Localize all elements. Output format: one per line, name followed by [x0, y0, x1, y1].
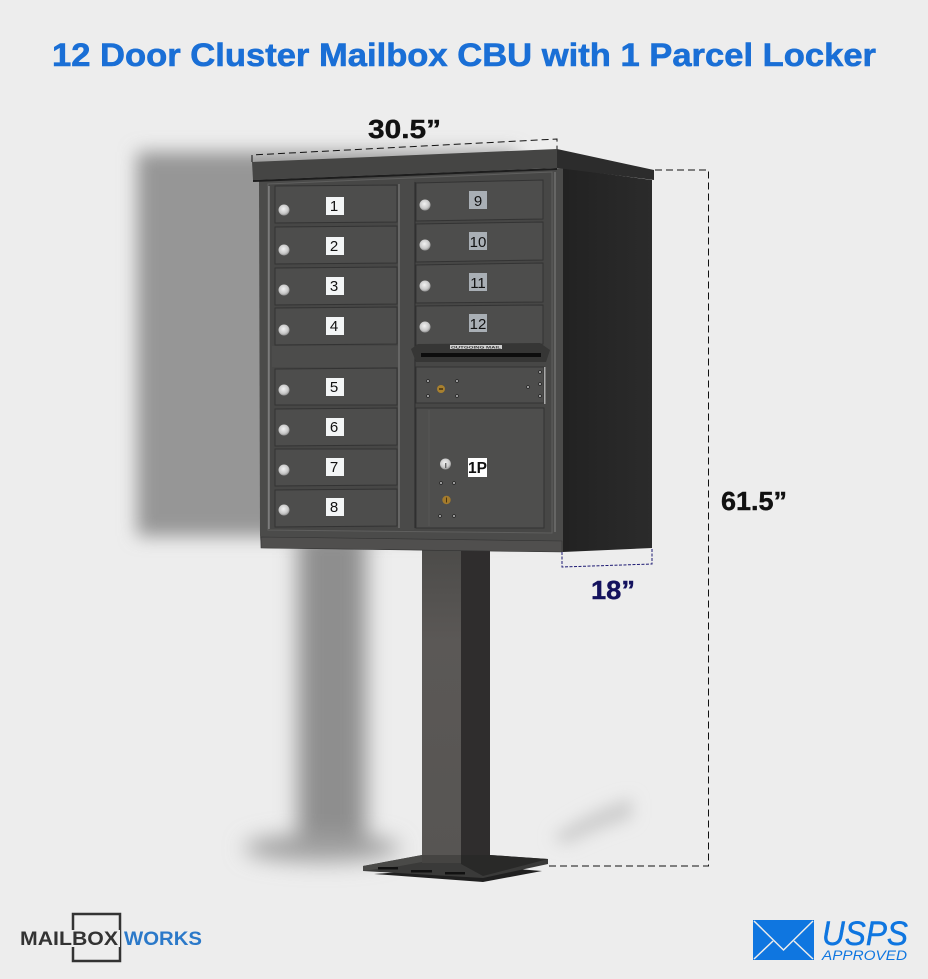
door number tags 1-8: 5 — [330, 379, 338, 396]
wall shadow of post — [244, 530, 400, 862]
door locks — [278, 200, 430, 516]
cabinet front — [259, 168, 563, 552]
door number tags 9-12: 9 — [474, 193, 482, 210]
logo: Mailbox Works: WORKS — [124, 929, 202, 950]
dimension: depth 18 — [562, 549, 652, 605]
cabinet side — [563, 168, 652, 552]
door number tags 9-12 — [469, 191, 487, 333]
door number tags 1-8: 4 — [330, 318, 338, 335]
door number tags 9-12: 12 — [470, 316, 486, 333]
pedestal post — [422, 548, 490, 860]
wall shadow of cabinet — [137, 152, 517, 536]
outgoing mail slot: OUTGOING MAIL — [451, 345, 502, 350]
outgoing mail slot — [411, 343, 550, 362]
master access panel — [416, 367, 546, 404]
dimension: depth 18: 18” — [591, 575, 635, 605]
door number tags 1-8: 2 — [330, 238, 338, 255]
cluster mailbox unit — [252, 149, 654, 882]
floor shadow right of post — [552, 798, 632, 844]
dimension: width 30.5: 30.5” — [368, 114, 441, 144]
inner door frame — [268, 172, 555, 533]
dimension: height 61.5: 61.5” — [721, 486, 787, 516]
door number tags 1-8: 3 — [330, 278, 338, 295]
logo: Mailbox Works: MAILBOX — [20, 929, 118, 950]
door number tags 1-8 — [326, 197, 344, 516]
base plate — [363, 855, 548, 882]
parcel locker door: 1P — [468, 460, 487, 477]
dimension: width 30.5 — [252, 114, 557, 162]
door number tags 1-8: 1 — [330, 198, 338, 215]
bottom plinth — [261, 537, 562, 552]
logo: USPS Approved — [753, 915, 908, 963]
logo: USPS Approved: APPROVED — [821, 948, 907, 963]
door number tags 1-8: 7 — [330, 459, 338, 476]
door number tags 9-12: 11 — [470, 275, 486, 292]
logo: Mailbox Works — [20, 914, 202, 961]
icon: envelope — [753, 920, 814, 960]
right mailbox doors 9-12 — [416, 180, 543, 345]
door number tags 9-12: 10 — [470, 234, 486, 251]
logo: USPS Approved: USPS — [822, 915, 908, 953]
door number tags 1-8: 6 — [330, 419, 338, 436]
door number tags 1-8: 8 — [330, 499, 338, 516]
parcel locker door — [416, 408, 544, 528]
dimension: height 61.5 — [548, 170, 787, 866]
roof — [252, 149, 654, 182]
left mailbox doors 1-8 — [275, 185, 397, 527]
title: 12 Door Cluster Mailbox CBU with 1 Parcel Locker — [52, 37, 876, 73]
